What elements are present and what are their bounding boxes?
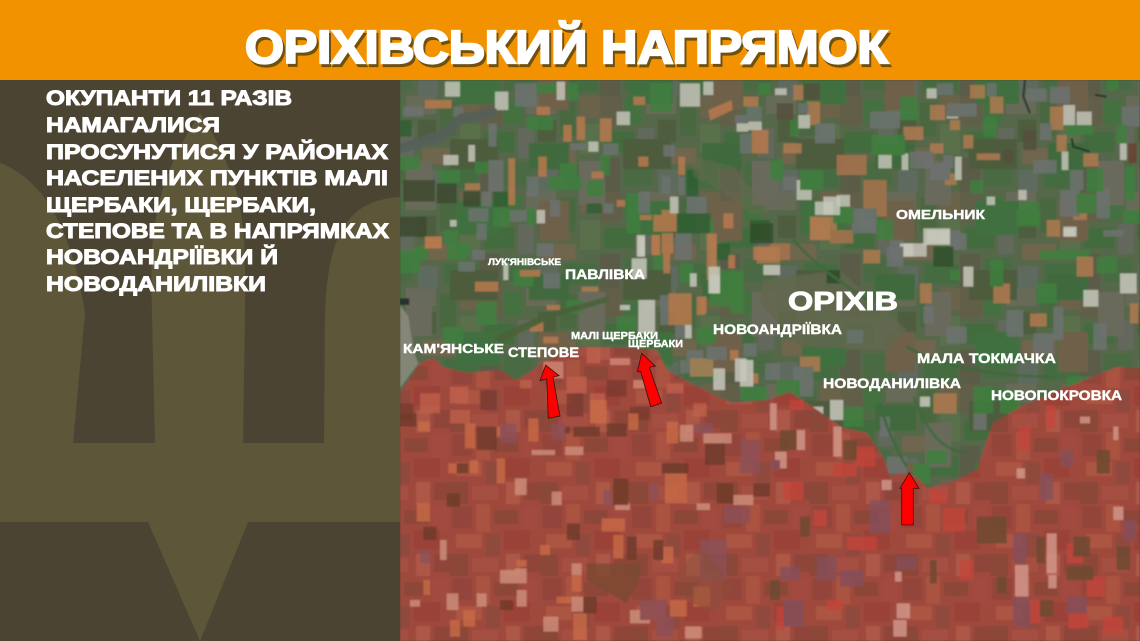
label: Novodanylivka: НОВОДАНИЛІВКА (823, 376, 961, 391)
label: Omelnyk: ОМЕЛЬНИК (896, 207, 985, 222)
text block: summary: НОВОАНДРІЇВКИ Й (46, 245, 278, 269)
label: Mali Shcherbaky: МАЛІ ЩЕРБАКИ (571, 331, 658, 342)
area: occupied territory overlay (400, 347, 1140, 641)
label: Kamianske: КАМ'ЯНСЬКЕ (403, 341, 504, 356)
arrow: Shcherbaky attack (637, 353, 662, 407)
label: Orikhiv: ОРІХІВ (788, 286, 898, 316)
text block: summary: ЩЕРБАКИ, ЩЕРБАКИ, (46, 194, 316, 217)
map labels (403, 207, 1122, 403)
arrow: Stepove attack (540, 365, 560, 418)
text block: summary: СТЕПОВЕ ТА В НАПРЯМКАХ (46, 220, 389, 243)
area: occupied territory fields (400, 340, 1140, 641)
icon: trident emblem (0, 113, 400, 641)
text block: summary (46, 87, 389, 296)
map: satellite fields (400, 80, 1140, 641)
panel: left text panel with trident (0, 80, 400, 641)
text block: summary: ПРОСУНУТИСЯ У РАЙОНАХ (46, 140, 388, 164)
text block: summary: НАМАГАЛИСЯ (46, 114, 220, 137)
label: Stepove: СТЕПОВЕ (508, 345, 579, 360)
text block: summary: НАСЕЛЕНИХ ПУНКТІВ МАЛІ (46, 167, 388, 190)
label: Novoandriivka: НОВОАНДРІЇВКА (713, 322, 842, 337)
arrow: Novodanylivka attack (900, 473, 919, 525)
label: Shcherbaky: ЩЕРБАКИ (628, 339, 683, 350)
text block: summary: НОВОДАНИЛІВКИ (46, 273, 266, 296)
header bar (0, 0, 1140, 80)
label: Mala Tokmachka: МАЛА ТОКМАЧКА (917, 351, 1056, 366)
label: Novopokrovka: НОВОПОКРОВКА (991, 388, 1122, 403)
title: ОРІХІВСЬКИЙ НАПРЯМОК (247, 24, 891, 76)
text block: summary: ОКУПАНТИ 11 РАЗІВ (46, 87, 292, 110)
label: Lukianivske: ЛУК'ЯНІВСЬКЕ (488, 257, 561, 267)
label: Pavlivka: ПАВЛІВКА (565, 267, 645, 282)
title: ОРІХІВСЬКИЙ НАПРЯМОК (245, 21, 889, 73)
